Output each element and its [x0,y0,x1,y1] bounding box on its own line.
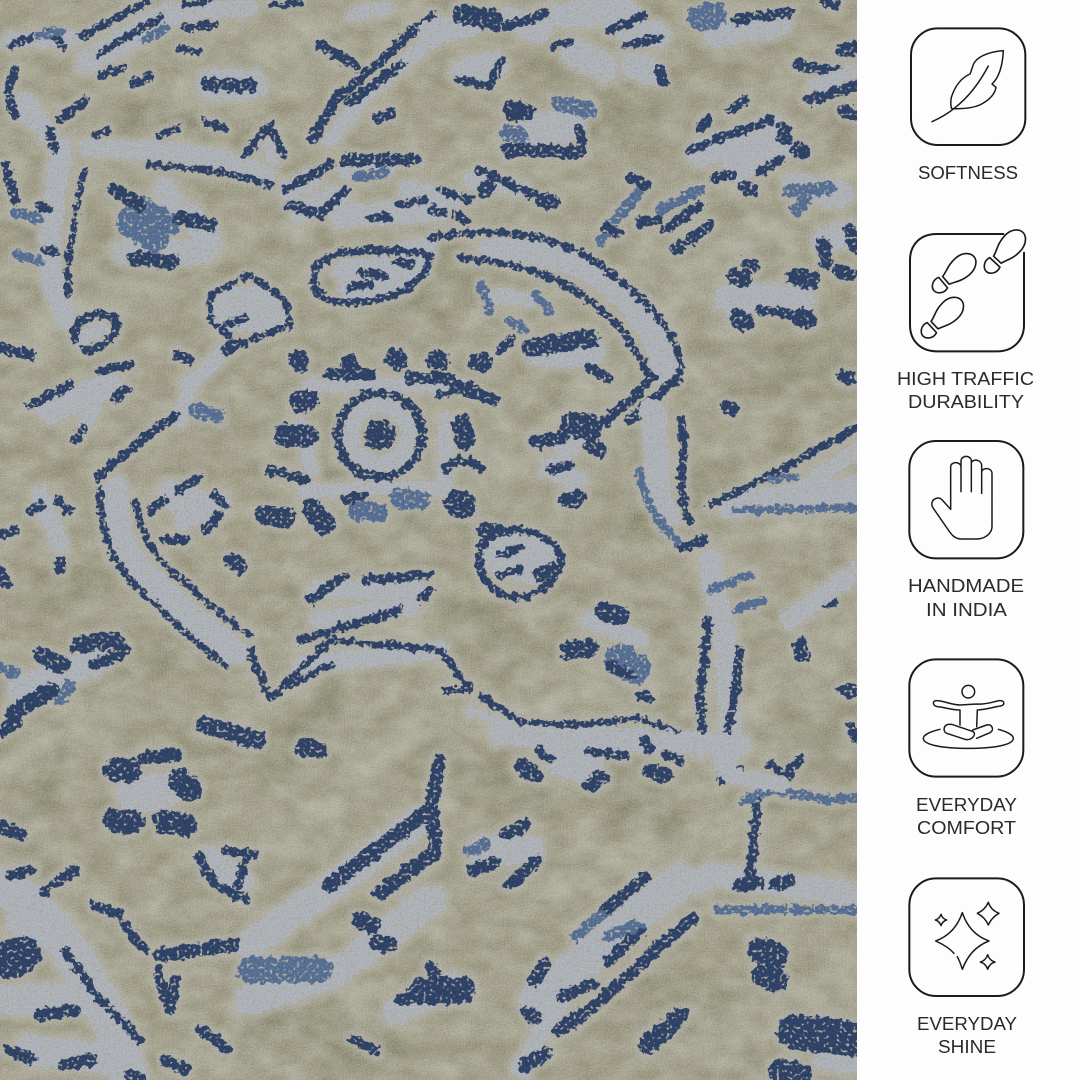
label: everyday shine [917,1014,1017,1057]
motif: inner flower [150,478,238,566]
feature: everyday comfort [909,659,1023,838]
motif: blue cross [115,190,210,262]
icon: sparkles [909,878,1024,996]
field mottling [0,0,857,1080]
motif: flower lower centre [470,825,535,885]
label: high traffic durability: DURABILITY [908,392,1024,412]
motif: centre left cluster [285,160,470,218]
motif: left medallion edge [0,314,235,585]
label: high traffic durability [897,369,1034,412]
motif: upper right arch band [430,210,680,380]
motif: far right cluster [790,185,855,274]
motif: big diagonal lower [158,760,440,1050]
motif: small blob [208,84,252,86]
motif: upper lower strip [500,735,740,785]
icon: feather [911,28,1025,145]
motif: left dark cluster [0,640,125,730]
motif: dark blobs lower right [648,950,857,1075]
motif: light blossom [210,275,290,345]
icon: hand [909,441,1023,558]
label: handmade in india: HANDMADE [908,576,1024,596]
motif: ring flower [314,245,430,302]
motif: top centre flowers [430,10,664,86]
motif: top left curved band [88,122,283,185]
feature: high traffic durability [897,225,1034,412]
motif: top left diagonals [10,0,300,150]
motif: lower right vertical band [700,560,857,770]
rug pile grain [0,0,857,1080]
motif: left vertical band [5,70,85,318]
motif: lower right band [680,725,857,910]
motif: dark flower lower left [115,755,190,825]
icon: meditating figure [909,659,1023,777]
label: everyday comfort [916,795,1017,838]
motif: dark cross right [535,378,677,500]
motif: flower centre [479,530,560,597]
motif: flower right [730,262,812,322]
icon: footprints [910,225,1031,351]
medallion centre dot [365,420,395,450]
motif: small cross lower [198,850,255,900]
motif: small dashes [470,170,552,202]
motif: lower arch band [100,490,250,665]
rug photo [0,0,857,1080]
feature: softness [911,28,1025,183]
feature: everyday shine [909,878,1024,1057]
label: softness: SOFTNESS [918,163,1018,183]
label: everyday shine: EVERYDAY [917,1014,1017,1034]
label: everyday comfort: COMFORT [917,818,1016,838]
label: everyday comfort: EVERYDAY [916,795,1017,815]
motif: inner arch marks [482,285,608,378]
motif: top right clusters [700,3,857,116]
feature: handmade in india [908,441,1024,620]
label: handmade in india: IN INDIA [926,600,1007,620]
label: handmade in india [908,576,1024,620]
motif: flower upper centre [508,104,590,152]
motif: lower medallion cluster [250,575,700,752]
label: high traffic durability: HIGH TRAFFIC [897,369,1034,389]
motif: right vertical band [640,410,705,548]
motif: right diagonal rays [710,375,857,510]
motif: diagonal ribs lower [520,877,693,1070]
motif: dark bars [0,725,318,835]
motif: dark strokes right [600,178,710,250]
motif: dark cluster centre right [570,612,650,698]
central medallion [265,358,495,525]
motif: light flower right [690,100,803,190]
motif: upper centre stem [312,8,432,140]
motif: dark spike [395,965,462,1012]
label: everyday shine: SHINE [938,1037,996,1057]
motif: lower left corner band [0,870,185,1080]
